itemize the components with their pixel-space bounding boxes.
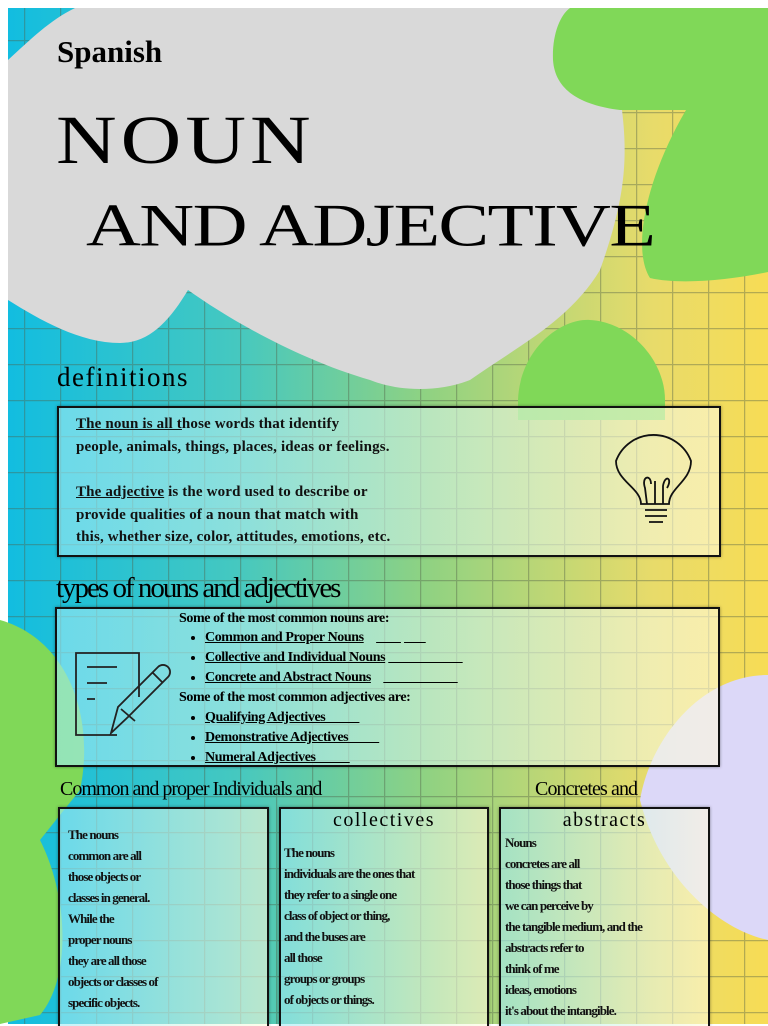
- text: concretes and abstracts: the tangible medium, and the: [505, 919, 642, 934]
- text: concretes and abstracts: it's about the intangible.: [505, 1003, 616, 1018]
- text: individuals and collectives: class of object or thing,: [284, 908, 389, 923]
- panel: collectives: [279, 807, 489, 1026]
- text: individuals and collectives: groups or groups: [284, 971, 364, 986]
- text: individuals and collectives: they refer to a single one: [284, 887, 396, 902]
- heading: types: types of nouns and adjectives: [56, 572, 339, 604]
- text: concretes and abstracts: abstracts refer to: [505, 940, 584, 955]
- list: nouns and adjectives: Numeral Adjectives: [205, 750, 316, 765]
- heading: concretes: Concretes and: [535, 778, 637, 800]
- list: nouns and adjectives: Qualifying Adjectives: [205, 710, 325, 725]
- text: common and proper: The nouns: [68, 827, 118, 842]
- text: noun definition: people, animals, things, places, ideas or feelings.: [76, 438, 390, 454]
- text: common and proper: While the: [68, 911, 114, 926]
- text: common and proper: classes in general.: [68, 890, 149, 905]
- title: NOUN: NOUN: [56, 102, 315, 179]
- list: nouns and adjectives: Collective and Individual Nouns: [205, 650, 385, 665]
- text: adjective definition: provide qualities of a noun that match with: [76, 506, 358, 522]
- text: concretes and abstracts: we can perceive by: [505, 898, 593, 913]
- title: AND ADJECTIVE: AND ADJECTIVE: [86, 192, 654, 259]
- heading: collectives: collectives: [333, 809, 435, 831]
- text: common and proper: [68, 827, 159, 1010]
- icon: document with pencil: [75, 652, 171, 736]
- panel: definitions: [57, 406, 721, 557]
- list: nouns and adjectives: [179, 611, 463, 765]
- text: common and proper: objects or classes of: [68, 974, 158, 989]
- text: adjective definition: this, whether size, color, attitudes, emotions, etc.: [76, 529, 390, 545]
- heading: common and proper / individuals: Common and proper Individuals and: [60, 778, 321, 800]
- text: concretes and abstracts: those things that: [505, 877, 581, 892]
- text: noun definition: The noun is all those words that identify: [76, 416, 339, 432]
- list: nouns and adjectives: Some of the most common adjectives are:: [179, 690, 410, 705]
- heading: abstracts: abstracts: [563, 809, 646, 831]
- text: concretes and abstracts: concretes are all: [505, 856, 579, 871]
- list: nouns and adjectives: Demonstrative Adjectives: [205, 730, 348, 745]
- text: individuals and collectives: and the buses are: [284, 929, 365, 944]
- text: common and proper: they are all those: [68, 953, 146, 968]
- heading: definitions: definitions: [57, 362, 189, 392]
- text: individuals and collectives: all those: [284, 950, 322, 965]
- subtitle: Spanish: [57, 34, 162, 69]
- text: concretes and abstracts: Nouns: [505, 835, 536, 850]
- text: concretes and abstracts: [505, 835, 643, 1018]
- text: common and proper: common are all: [68, 848, 141, 863]
- text: individuals and collectives: of objects or things.: [284, 992, 374, 1007]
- list: nouns and adjectives: Concrete and Abstract Nouns: [205, 670, 371, 685]
- panel: abstracts: [499, 807, 710, 1026]
- list: nouns and adjectives: Common and Proper Nouns: [205, 630, 364, 645]
- text: common and proper: proper nouns: [68, 932, 132, 947]
- text: noun definition: [76, 416, 390, 454]
- text: individuals and collectives: The nouns: [284, 845, 334, 860]
- text: individuals and collectives: [284, 845, 416, 1007]
- panel: common and proper: [58, 807, 269, 1026]
- text: adjective definition: [76, 484, 390, 545]
- panel: types: [55, 607, 720, 767]
- text: concretes and abstracts: ideas, emotions: [505, 982, 576, 997]
- text: common and proper: specific objects.: [68, 995, 139, 1010]
- text: concretes and abstracts: think of me: [505, 961, 559, 976]
- text: individuals and collectives: individuals are the ones that: [284, 866, 414, 881]
- list: nouns and adjectives: Some of the most common nouns are:: [179, 611, 389, 626]
- text: adjective definition: The adjective is the word used to describe or: [76, 484, 368, 500]
- icon: light bulb: [615, 434, 692, 523]
- text: common and proper: those objects or: [68, 869, 140, 884]
